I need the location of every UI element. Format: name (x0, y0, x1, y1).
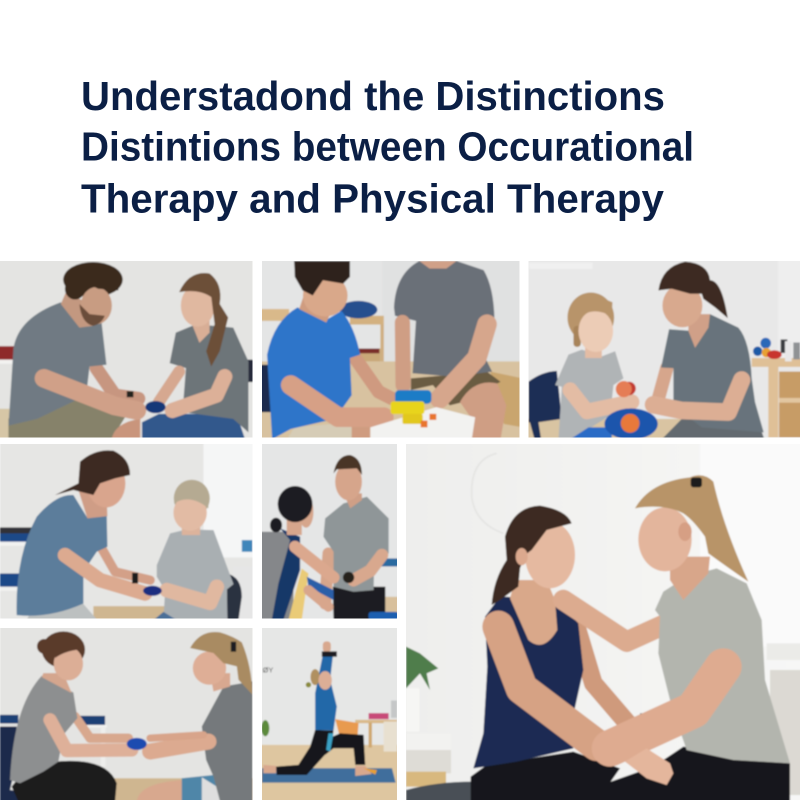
woman in grey shirt (142, 273, 248, 439)
woman with ponytail (137, 632, 252, 800)
title (81, 73, 694, 222)
wooden table with items (355, 700, 397, 752)
therapy ball (143, 586, 162, 596)
blue yoga mat (262, 768, 396, 783)
seated woman in light grey shirt (153, 480, 233, 620)
wall text mark: ØY (263, 665, 273, 674)
title: Understadond the Distinctions (81, 73, 665, 119)
shelf with toys (752, 338, 800, 438)
icon: plant (261, 720, 269, 736)
therapist in blue shirt (17, 450, 150, 620)
woman in navy tank top (471, 506, 633, 800)
boy in blue shirt (267, 261, 392, 439)
icon: navy chair (528, 371, 562, 439)
man in grey polo (394, 261, 506, 439)
panel: boy stacking blocks (262, 261, 520, 438)
icon: dark chair (227, 573, 242, 620)
white side cabinet (406, 688, 451, 787)
panel: man and woman with therapy ball (0, 261, 252, 438)
woman from behind in tank top (260, 486, 334, 620)
panel: therapist with seated older woman (0, 444, 252, 618)
therapy ball (145, 401, 166, 413)
person in lunge pose (263, 641, 377, 776)
woman with hair bun (10, 631, 132, 800)
girl in grey shirt (555, 292, 632, 439)
icon: blue cushion (339, 301, 377, 318)
panel: yoga lunge exercise (262, 628, 397, 800)
therapist in grey polo (653, 262, 764, 439)
woman in grey t-shirt (563, 475, 790, 800)
window sill and radiator (767, 643, 800, 795)
icon: potted plant (406, 647, 438, 690)
man in grey shirt (8, 262, 140, 439)
icon: navy chair (0, 727, 60, 800)
panel: man guiding woman with weight (262, 444, 397, 618)
blue ball with orange spot (604, 381, 658, 440)
therapy ball (127, 738, 147, 750)
panel: large photo of shoulder assessment (406, 444, 800, 800)
coloured blocks on table (370, 390, 475, 439)
title: Therapy and Physical Therapy (81, 176, 664, 222)
man in grey shirt (323, 455, 389, 620)
panel: two women with hand therapy (0, 628, 252, 800)
title: Distintions between Occurational (81, 124, 694, 170)
panel: child with therapist and balls (528, 261, 800, 438)
